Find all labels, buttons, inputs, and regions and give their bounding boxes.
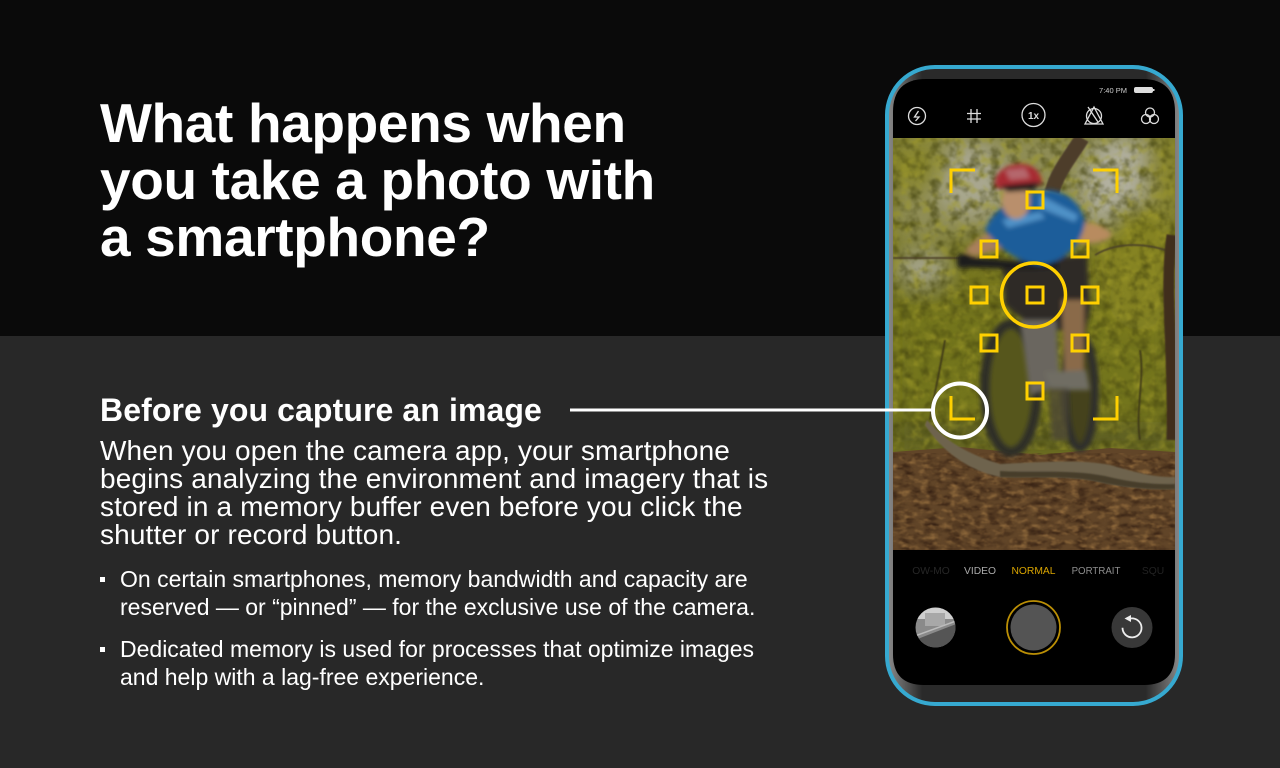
phone body [887, 67, 1181, 704]
intro paragraph: begins analyzing the environment and imagery that is [100, 463, 768, 494]
icon: zoom 1x: 1x [1028, 111, 1039, 122]
flip camera button [1112, 607, 1152, 648]
bullet text 2: Dedicated memory is used for processes that optimize images [120, 636, 754, 662]
intro paragraph: When you open the camera app, your smartphone [100, 435, 730, 466]
shutter button [1007, 601, 1060, 654]
forest floor [893, 447, 1175, 550]
lower panel background [0, 336, 1280, 768]
photo of mountain biker [888, 130, 1182, 550]
focus guides [951, 170, 1117, 419]
callout line and circle [570, 384, 987, 438]
gallery thumbnail [915, 607, 956, 648]
phone illustration [570, 65, 1183, 706]
title: What happens when [100, 92, 626, 154]
status bar: 7:40 PM [1099, 86, 1127, 95]
bullet text 2 [120, 636, 754, 690]
bullet text 1: reserved — or “pinned” — for the exclusive use of the camera. [120, 594, 755, 620]
bullet text 2: and help with a lag-free experience. [120, 664, 484, 690]
background foliage and sky [888, 130, 1182, 452]
title: a smartphone? [100, 206, 490, 268]
mode selector: VIDEO [964, 566, 996, 577]
status bar [1099, 86, 1154, 95]
mode selector: SQU [1142, 566, 1164, 577]
bullet text 1: On certain smartphones, memory bandwidth and capacity are [120, 566, 748, 592]
mode selector: PORTRAIT [1072, 566, 1120, 577]
icon: zoom 1x [1022, 104, 1045, 126]
bullet text 1 [120, 566, 755, 620]
title [100, 92, 655, 268]
intro paragraph: shutter or record button. [100, 519, 402, 550]
mode selector: NORMAL [1011, 566, 1056, 577]
mode selector: OW-MO [912, 566, 950, 577]
bullet marker 1 [100, 577, 105, 582]
heading: before you capture an image: Before you capture an image [100, 392, 542, 428]
bike wheels [985, 324, 1095, 452]
icon: color filters [1142, 108, 1158, 124]
camera toolbar icons [908, 104, 1158, 126]
bullet marker 2 [100, 647, 105, 652]
autofocus corner brackets [951, 170, 1117, 419]
icon: aperture shapes [1085, 107, 1103, 124]
title: you take a photo with [100, 149, 655, 211]
branches and tree trunks [893, 138, 1172, 440]
log root [925, 420, 1175, 489]
intro paragraph [100, 435, 768, 550]
icon: flash [908, 108, 926, 124]
autofocus squares [971, 192, 1098, 399]
intro paragraph: stored in a memory buffer even before you click the [100, 491, 743, 522]
icon: grid [967, 109, 981, 123]
focus circle [1002, 263, 1066, 327]
rider blurred [957, 164, 1112, 440]
mode selector [912, 566, 1164, 577]
